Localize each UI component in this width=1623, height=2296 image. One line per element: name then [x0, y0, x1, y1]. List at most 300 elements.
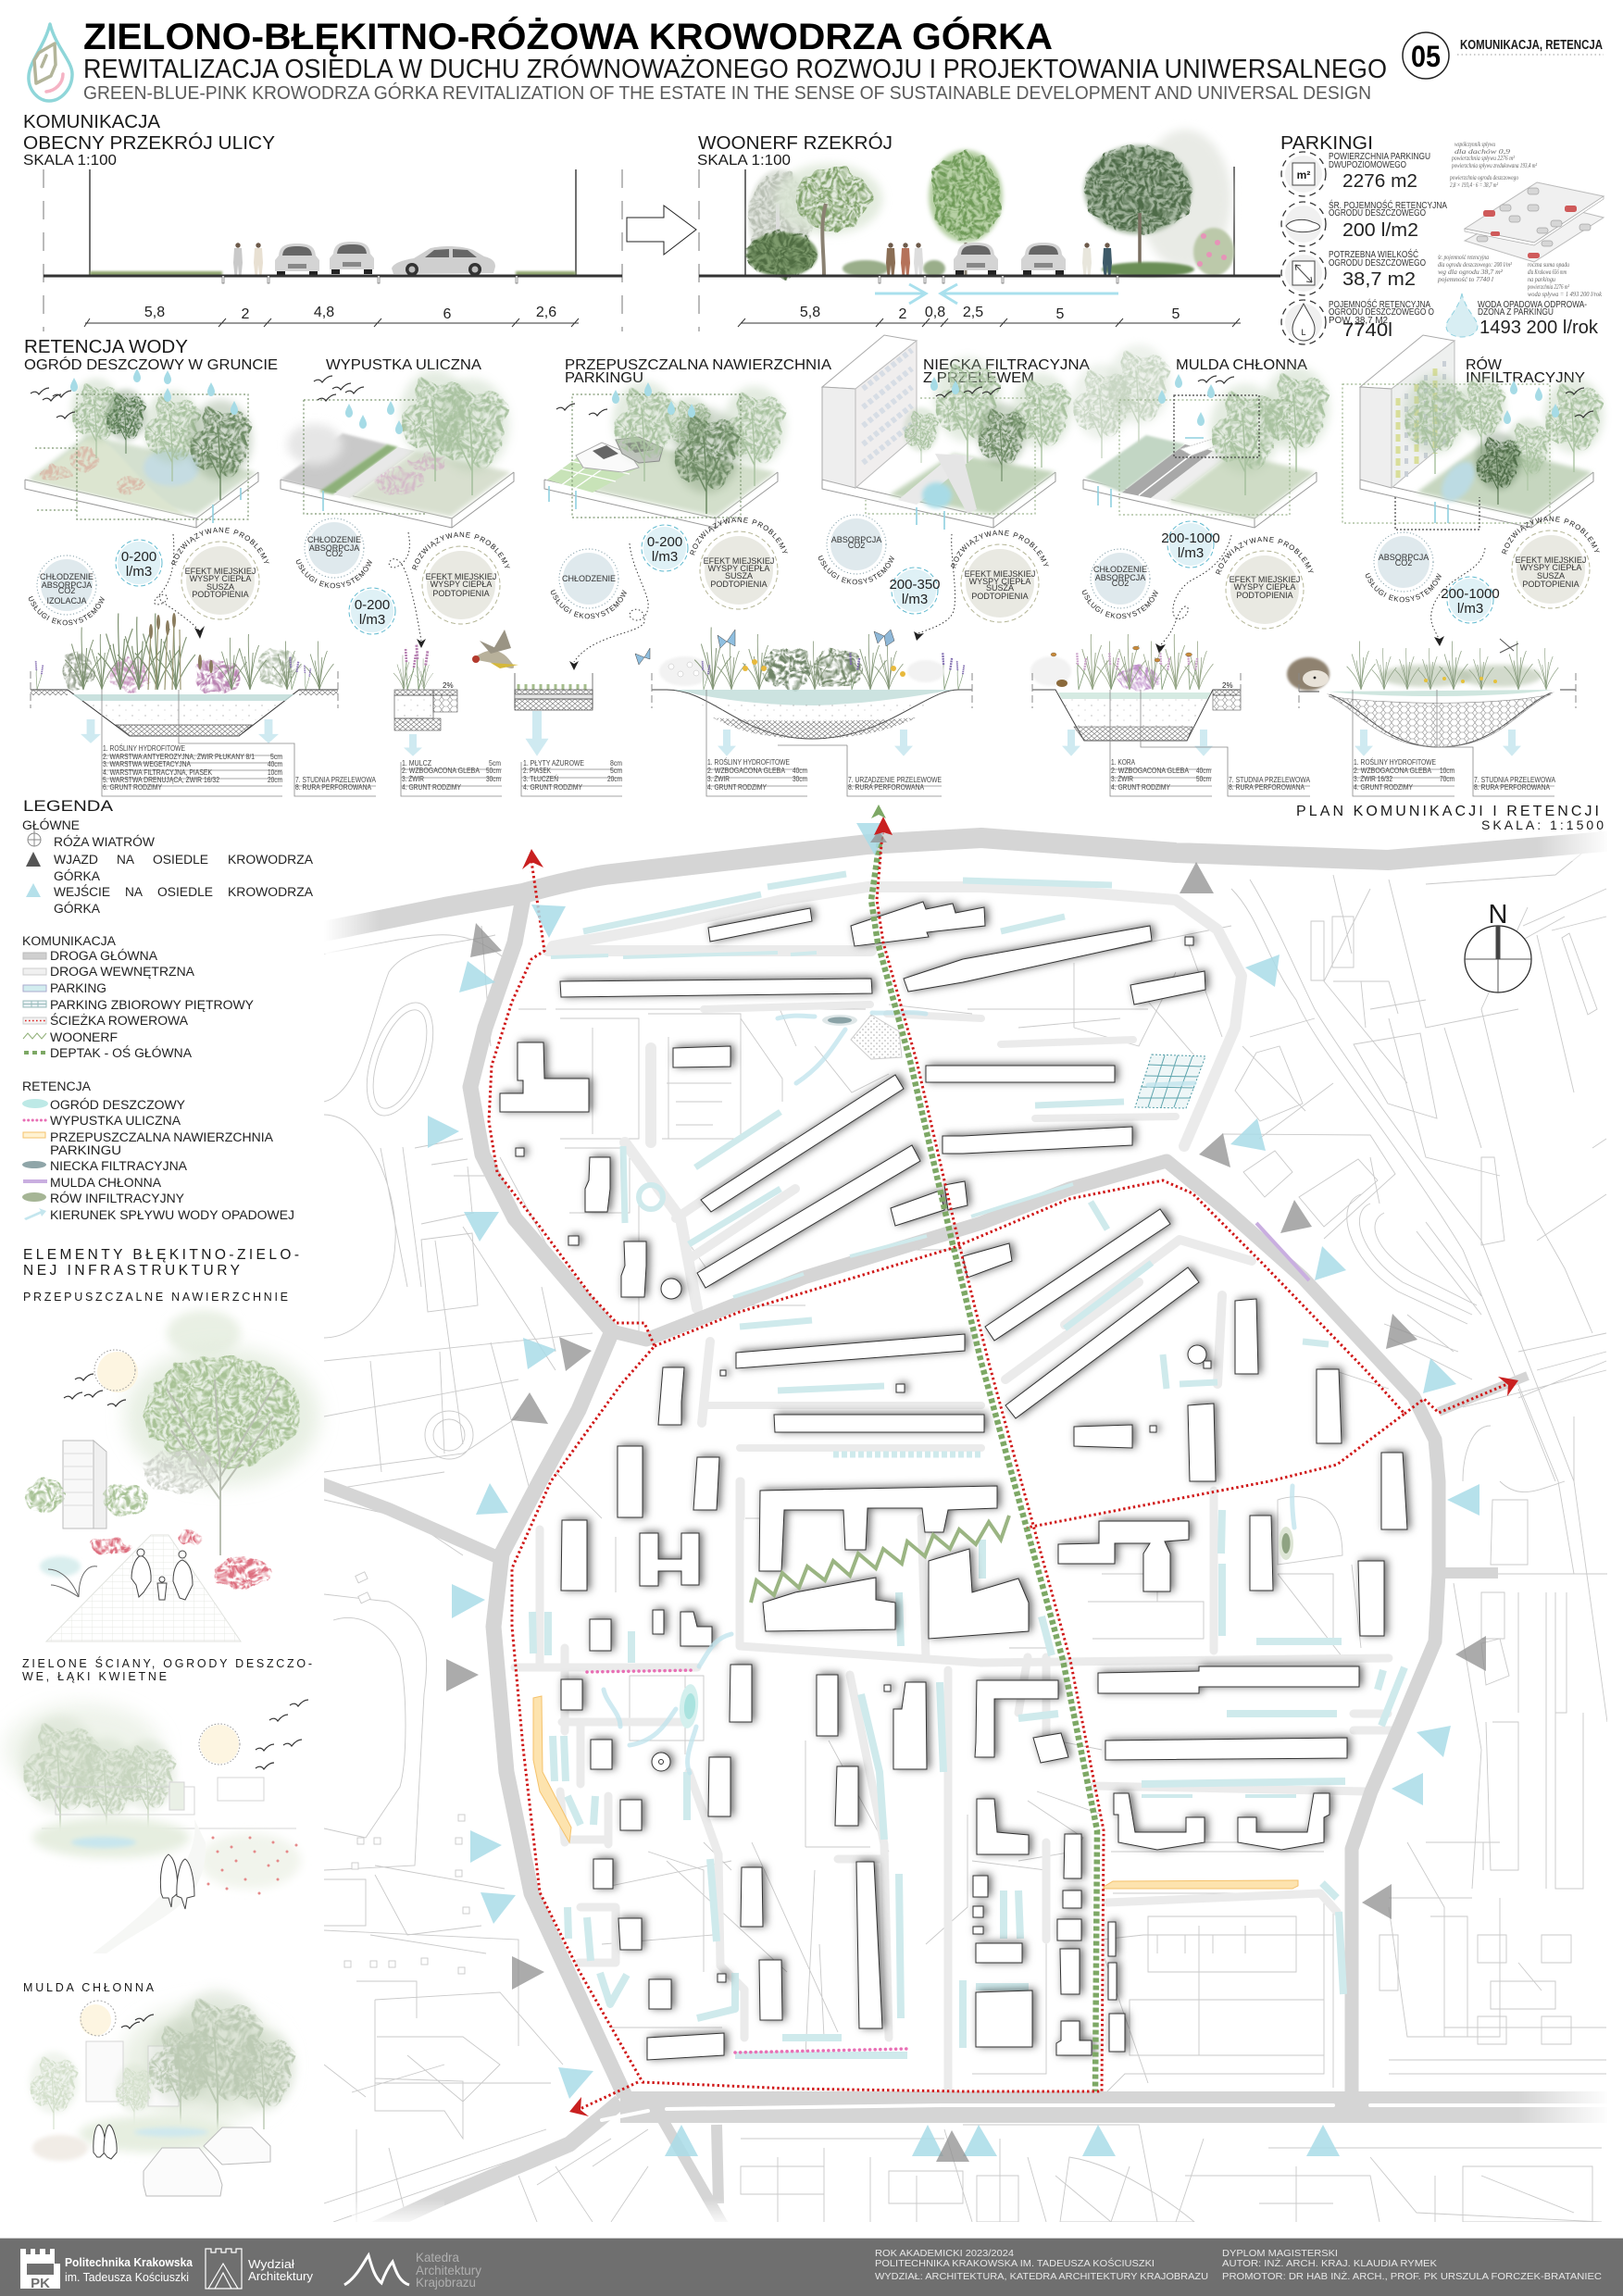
sheet number badge: 05	[1411, 40, 1441, 73]
university name: Politechnika Krakowska	[65, 2256, 194, 2269]
ecosystem diagrams: block 1	[26, 526, 271, 639]
group: retencja: RÓW INFILTRACYJNY	[50, 1192, 184, 1205]
street inlets	[587, 1670, 907, 2053]
layers table: 7. STUDNIA PRZELEWOWA	[295, 776, 377, 784]
ecosystem diagrams: block 3: SUSZA	[725, 571, 753, 580]
layers table: 3. ŻWIR 16/32	[1354, 775, 1392, 783]
metric: garden size	[1281, 248, 1426, 295]
ecosystem diagrams: block 5: USŁUGI EKOSYSTEMÓW	[1080, 589, 1161, 620]
butterflies	[635, 630, 894, 665]
heading: zielone ściany	[22, 1656, 312, 1683]
ecosystem diagrams: block 4: 200-350	[889, 577, 941, 593]
scale: SKALA 1:100	[697, 153, 791, 168]
iso block 4: filtration basin	[822, 335, 1071, 530]
absorbing swale	[1256, 1223, 1309, 1280]
iso block 1: rain garden	[25, 368, 258, 528]
layers table: 1. MULCZ	[402, 759, 431, 767]
heading: LEGENDA	[23, 797, 114, 815]
academic info	[875, 2249, 1208, 2282]
layers table: 20cm	[607, 775, 622, 783]
arrow: before to after	[627, 206, 696, 255]
group: retencja: OGRÓD DESZCZOWY	[50, 1098, 185, 1112]
layers table: 50cm	[1196, 775, 1211, 783]
heading: plan: PLAN KOMUNIKACJI I RETENCJI	[1296, 804, 1599, 819]
services circle	[26, 555, 107, 627]
department name	[416, 2250, 481, 2290]
layers table: 40cm	[268, 760, 282, 768]
department name: Krajobrazu	[416, 2275, 476, 2290]
heading: woonerf: WOONERF RZEKRÓJ	[698, 132, 893, 154]
handwritten notes: dla dachów 0,9	[1454, 147, 1510, 156]
sheet number badge	[1403, 32, 1449, 79]
subheads of six solutions: Z PRZELEWEM	[923, 370, 1034, 386]
trees	[747, 130, 1234, 277]
heading: elementy: NEJ INFRASTRUKTURY	[23, 1263, 240, 1279]
group: główne: KROWODRZA	[228, 853, 313, 867]
axis arrowhead	[871, 805, 886, 818]
route arrowheads	[522, 817, 1518, 2116]
scale: SKALA 1:100	[23, 153, 117, 168]
metric: area: POWIERZCHNIA PARKINGU	[1329, 152, 1430, 162]
plan scale: SKALA: 1:1500	[1481, 817, 1604, 832]
university name: im. Tadeusza Kościuszki	[65, 2271, 189, 2284]
layers table: 1. ROŚLINY HYDROFITOWE	[1354, 758, 1436, 767]
group: główne: NA	[117, 853, 134, 867]
layers table: 8cm	[610, 759, 622, 767]
ecosystem diagrams: block 6: EFEKT MIEJSKIEJ	[1516, 555, 1586, 565]
internal roads	[515, 887, 1401, 2091]
parking strips	[532, 874, 1405, 2055]
iso block 5: absorbing swale	[1072, 344, 1330, 528]
heading: zielone ściany: WE, ŁĄKI KWIETNE	[22, 1670, 167, 1683]
cross-section 6: infiltration ditch	[1287, 639, 1576, 796]
iso block 2: street inlet	[281, 370, 514, 528]
group: główne: KROWODRZA	[228, 885, 313, 899]
ecosystem diagrams: block 5: PODTOPIENIA	[1236, 591, 1293, 600]
illustration: permeable surfaces	[26, 1310, 319, 1641]
group: komunikacja: DROGA GŁÓWNA	[50, 949, 157, 963]
ecosystem diagrams: block 2: PODTOPIENIA	[432, 589, 490, 598]
handwritten notes: powierzchnia 2276 m²	[1527, 282, 1569, 291]
group: główne: OSIEDLE	[153, 853, 208, 867]
value circle	[116, 540, 162, 586]
ecosystem diagrams: block 5: ROZWIĄZYWANE PROBLEMY	[1214, 535, 1316, 576]
rainwater text: DZONA Z PARKINGU	[1478, 307, 1554, 318]
ecosystem diagrams: block 5: l/m3	[1178, 545, 1204, 561]
layers table: 5cm	[610, 767, 622, 775]
dimension line: 5,8	[800, 305, 820, 320]
group: główne: NA	[125, 885, 143, 899]
services circle: IZOLACJA	[46, 596, 87, 605]
metric: area: m²	[1297, 168, 1310, 181]
dimension line	[84, 305, 579, 327]
iso block 3: permeable parking	[544, 381, 786, 528]
group: główne	[22, 818, 313, 916]
layers table: 40cm	[793, 767, 807, 775]
heading: retencja wody: RETENCJA WODY	[24, 337, 188, 357]
english subtitle: GREEN-BLUE-PINK KROWODRZA GÓRKA REVITALIZATION OF THE ESTATE IN THE SENSE OF SUSTAINABLE DEVELOPMENT AND UNIVERSAL DESIGN	[83, 82, 1371, 104]
ecosystem diagrams: block 3: l/m3	[652, 549, 678, 565]
water features	[678, 1015, 1293, 1729]
bird illustration	[472, 630, 518, 668]
group: główne: GŁÓWNE	[22, 818, 80, 832]
logo: department	[344, 2255, 409, 2285]
layers table: 4. GRUNT RODZIMY	[1111, 783, 1171, 792]
metric: retention: ŚR. POJEMNOŚĆ RETENCYJNA	[1329, 199, 1447, 211]
layers table: 1. PŁYTY AŻUROWE	[523, 759, 584, 767]
ecosystem diagrams: block 3: 0-200	[647, 534, 682, 550]
dimension line	[738, 305, 1241, 327]
metric: retention	[1281, 199, 1447, 246]
logo: PK	[20, 2249, 60, 2291]
ecosystem diagrams: block 2: l/m3	[359, 612, 385, 628]
group: komunikacja: DROGA WEWNĘTRZNA	[50, 965, 194, 979]
dimension line: 2	[242, 306, 250, 322]
pavement	[46, 1535, 241, 1641]
ecosystem diagrams: block 5: ABSORPCJA	[1095, 573, 1145, 582]
handwritten notes: na parkingu	[1528, 275, 1555, 283]
ecosystem diagrams: block 2: CO2	[326, 549, 343, 558]
subheads of six solutions	[24, 357, 1585, 386]
water flow arrows	[604, 1013, 1294, 1773]
academic info: WYDZIAŁ: ARCHITEKTURA, KATEDRA ARCHITEKTURY KRAJOBRAZU	[875, 2272, 1208, 2282]
handwritten notes: powierzchnia ogrodu deszczowego	[1449, 173, 1518, 181]
group: retencja: RETENCJA	[22, 1079, 91, 1093]
group: główne: WJAZD	[54, 853, 98, 867]
handwritten notes: wg dla ogrodu 38,7 m²	[1438, 268, 1504, 276]
layers table: 3. ŻWIR	[402, 775, 424, 783]
ecosystem diagrams: block 5	[1080, 521, 1316, 654]
heading: elementy	[23, 1247, 299, 1279]
group: główne: RÓŻA WIATRÓW	[54, 835, 155, 849]
handwritten notes: pojemność to 7740 l	[1437, 275, 1493, 283]
logo: PK: PK	[31, 2276, 50, 2291]
title: ZIELONO-BŁĘKITNO-RÓŻOWA KROWODRZA GÓRKA	[83, 15, 1053, 57]
panel: parkingi	[1280, 133, 1604, 344]
layers table: 30cm	[793, 775, 807, 783]
layers table: 2. WZBOGACONA GLEBA	[1111, 767, 1190, 775]
compass: N	[1489, 900, 1507, 930]
layers table: 2. WZBOGACONA GLEBA	[707, 767, 786, 775]
layers table: 2. WARSTWA ANTYEROZYJNA, ŻWIR PŁUKANY 8/1	[103, 753, 255, 761]
thesis info: DYPLOM MAGISTERSKI	[1222, 2249, 1338, 2259]
layers table: 7. STUDNIA PRZELEWOWA	[1229, 776, 1311, 784]
ecosystem diagrams: block 2: WYSPY CIEPŁA	[431, 580, 492, 589]
metric: capacity: OGRODU DESZCZOWEGO O	[1329, 307, 1434, 318]
metric: area	[1281, 152, 1430, 196]
subtitle: REWITALIZACJA OSIEDLA W DUCHU ZRÓWNOWAŻONEGO ROZWOJU I PROJEKTOWANIA UNIWERSALNEGO	[83, 54, 1387, 84]
ecosystem diagrams: block 6: ROZWIĄZYWANE PROBLEMY	[1500, 515, 1602, 555]
ecosystem diagrams: block 3: EFEKT MIEJSKIEJ	[704, 556, 774, 566]
people	[160, 1854, 194, 1909]
buildings	[500, 902, 1407, 2060]
layers table: 3. TŁUCZEŃ	[523, 775, 558, 783]
thesis info: PROMOTOR: DR HAB INŻ. ARCH., PROF. PK URSZULA FORCZEK-BRATANIEC	[1222, 2270, 1602, 2282]
metric: capacity: L	[1301, 328, 1306, 337]
dimension line: 5,8	[144, 305, 165, 320]
group: komunikacja: ŚCIEŻKA ROWEROWA	[50, 1014, 188, 1028]
metric: retention: OGRODU DESZCZOWEGO	[1329, 208, 1426, 218]
building	[1360, 335, 1454, 488]
group: główne: WEJŚCIE	[54, 885, 110, 899]
site plan	[315, 805, 1616, 2231]
map edge fades	[324, 824, 1611, 2227]
ecosystem diagrams: block 6: l/m3	[1457, 601, 1483, 617]
cross-section 5: swale: 2%	[1222, 681, 1233, 690]
ecosystem diagrams: block 4: USŁUGI EKOSYSTEMÓW	[816, 555, 897, 586]
group: retencja: PRZEPUSZCZALNA NAWIERZCHNIA	[50, 1130, 273, 1144]
group: komunikacja: DEPTAK - OŚ GŁÓWNA	[50, 1046, 192, 1060]
metric: capacity: POW. 38,7 M2	[1329, 316, 1388, 326]
ecosystem diagrams: block 2: EFEKT MIEJSKIEJ	[426, 572, 496, 581]
layers table: 7. STUDNIA PRZELEWOWA	[1474, 776, 1556, 784]
handwritten notes: woda spływa = 1 493 200 l/rok	[1528, 290, 1603, 298]
buildings	[86, 2041, 179, 2106]
ecosystem diagrams: block 6: SUSZA	[1537, 571, 1565, 580]
layers table: 4. WARSTWA FILTRACYJNA, PIASEK	[103, 768, 213, 777]
legend panel	[22, 797, 313, 1222]
permeable surface hatch	[851, 1015, 902, 1059]
heading: komunikacja: KOMUNIKACJA	[23, 112, 161, 132]
woonerf street section	[699, 130, 1280, 331]
layers table: 70cm	[1440, 775, 1454, 783]
ecosystem diagrams: block 4: ROZWIĄZYWANE PROBLEMY	[949, 529, 1051, 569]
logo: faculty	[206, 2249, 242, 2289]
ecosystem diagrams: block 4: SUSZA	[986, 583, 1014, 593]
main promenade axis	[871, 836, 1097, 2091]
layers table: 4. GRUNT RODZIMY	[523, 783, 583, 792]
metric: capacity	[1281, 298, 1434, 344]
layers table: 5cm	[270, 753, 282, 761]
subheads of six solutions: WYPUSTKA ULICZNA	[326, 357, 482, 373]
faculty name: Architektury	[248, 2269, 313, 2283]
ecosystem diagrams: block 2: USŁUGI EKOSYSTEMÓW	[296, 559, 372, 589]
permeable parking zones	[533, 1696, 1298, 1889]
cross-section 2: street inlet	[393, 644, 502, 796]
footer bar	[0, 2238, 1623, 2296]
handwritten notes: roczna suma opadu	[1528, 260, 1569, 268]
connector arrow	[155, 534, 200, 631]
metric: garden size: OGRODU DESZCZOWEGO	[1329, 258, 1426, 268]
group: komunikacja: KOMUNIKACJA	[22, 934, 116, 948]
cross-section 2: street inlet: 2%	[443, 681, 454, 690]
layers table: 3. WARSTWA WEGETACYJNA	[103, 760, 192, 768]
problems circle: PODTOPIENIA	[192, 590, 249, 599]
layers table: 8. RURA PERFOROWANA	[848, 783, 925, 792]
cars	[576, 437, 663, 472]
subheads of six solutions: NIECKA FILTRACYJNA	[923, 357, 1091, 373]
multi-level parking grid	[1135, 1054, 1205, 1108]
group: komunikacja: WOONERF	[50, 1030, 118, 1044]
metric: capacity: 7740l	[1342, 320, 1392, 341]
rainwater text: 1493 200 l/rok	[1479, 318, 1599, 338]
cars	[275, 242, 495, 276]
layers table: 20cm	[268, 776, 282, 784]
value circle: l/m3	[126, 564, 152, 580]
ecosystem diagrams: block 5: EFEKT MIEJSKIEJ	[1230, 575, 1300, 584]
layers table: 3. ŻWIR	[1111, 775, 1133, 783]
layers table: 1. KORA	[1111, 758, 1136, 767]
handwritten notes: 2,8 × 193,4 · 6 = 38,7 m²	[1450, 181, 1499, 189]
cross-section 4: filtration basin	[652, 628, 972, 796]
isometric parking	[1465, 182, 1604, 262]
ecosystem diagrams: block 6: WYSPY CIEPŁA	[1520, 563, 1581, 572]
people and cars	[886, 243, 1112, 276]
layers table: 10cm	[1440, 767, 1454, 775]
subheads of six solutions: RÓW	[1466, 357, 1502, 373]
group: retencja: NIECKA FILTRACYJNA	[50, 1159, 187, 1173]
subheads of six solutions: PARKINGU	[565, 370, 643, 386]
ecosystem diagrams: block 3: CHŁODZENIE	[562, 574, 616, 583]
metric: area: DWUPOZIOMOWEGO	[1329, 160, 1406, 170]
dimension line: 2	[899, 306, 907, 322]
layers table: 8. RURA PERFOROWANA	[1474, 783, 1551, 792]
people	[94, 2125, 117, 2159]
layers table	[1353, 690, 1556, 796]
layers table: 7. URZĄDZENIE PRZELEWOWE	[848, 776, 942, 784]
layers table: 50cm	[486, 767, 501, 775]
handwritten notes: dla Krakowa 656 mm	[1528, 268, 1567, 276]
ecosystem diagrams: block 6: PODTOPIENIA	[1522, 580, 1579, 589]
illustration: absorbing swale	[29, 1990, 295, 2196]
layers table: 5cm	[489, 759, 501, 767]
dimension line: 2,5	[963, 305, 983, 320]
ecosystem diagrams: block 6: CO2	[1395, 558, 1412, 568]
water flow arrows	[875, 284, 1118, 304]
group: komunikacja: PARKING	[50, 981, 106, 995]
ecosystem diagrams: block 4: PODTOPIENIA	[971, 592, 1029, 601]
heading: mulda chłonna: MULDA CHŁONNA	[23, 1981, 155, 1994]
layers table: 4. GRUNT RODZIMY	[1354, 783, 1414, 792]
subheads of six solutions: INFILTRACYJNY	[1466, 370, 1585, 386]
ecosystem diagrams: block 4: WYSPY CIEPŁA	[969, 577, 1030, 586]
layers table	[401, 759, 502, 796]
academic info: ROK AKADEMICKI 2023/2024	[875, 2249, 1014, 2259]
thesis info: AUTOR: INŻ. ARCH. KRAJ. KLAUDIA RYMEK	[1222, 2257, 1437, 2269]
handwritten notes: powierzchnia spływu zredukowana 193,4 m²	[1451, 161, 1538, 169]
layers table: 1. ROŚLINY HYDROFITOWE	[103, 744, 185, 753]
group: główne: GÓRKA	[54, 869, 100, 883]
ecosystem diagrams: block 6	[1363, 515, 1602, 646]
layers table: 1. ROŚLINY HYDROFITOWE	[707, 758, 790, 767]
layers table	[521, 759, 622, 796]
faculty name	[248, 2257, 313, 2283]
ecosystem diagrams: block 2: 0-200	[355, 597, 390, 613]
department name: Architektury	[416, 2263, 481, 2277]
heading: obecny przekrój: OBECNY PRZEKRÓJ ULICY	[23, 132, 275, 154]
subheads of six solutions: MULDA CHŁONNA	[1176, 357, 1308, 373]
value circle: 0-200	[121, 549, 156, 565]
cycle routes	[489, 822, 1507, 2111]
department name: Katedra	[416, 2250, 459, 2265]
cadastre linework	[324, 833, 1607, 2222]
metric: area: 2276 m2	[1342, 171, 1417, 192]
layers table: 10cm	[268, 768, 282, 777]
layers table: 3. ŻWIR	[707, 775, 730, 783]
group: retencja: WYPUSTKA ULICZNA	[50, 1114, 181, 1128]
dimension line: 4,8	[314, 305, 334, 320]
services circle: CO2	[58, 586, 75, 595]
cars	[144, 2128, 270, 2196]
ecosystem diagrams: block 3: PODTOPIENIA	[710, 580, 768, 589]
layers table: 30cm	[486, 775, 501, 783]
current street section	[44, 169, 622, 331]
ecosystem diagrams: block 2	[293, 518, 512, 648]
layers table: 5. WARSTWA DRENUJĄCA, ŻWIR 16/32	[103, 776, 219, 784]
logo: drop	[29, 24, 72, 101]
ecosystem diagrams: block 2: ABSORPCJA	[309, 543, 359, 553]
ecosystem diagrams: block 3: WYSPY CIEPŁA	[708, 564, 769, 573]
handwritten notes: powierzchnia spływu 2276 m²	[1451, 154, 1516, 162]
academic info: POLITECHNIKA KRAKOWSKA IM. TADEUSZA KOŚCIUSZKI	[875, 2257, 1155, 2269]
plants	[36, 613, 333, 693]
plants	[659, 628, 964, 690]
building	[822, 335, 917, 488]
ecosystem diagrams: block 5: CO2	[1112, 579, 1129, 588]
layers table: 4. GRUNT RODZIMY	[707, 783, 768, 792]
rainwater text: WODA OPADOWA ODPROWA-	[1478, 300, 1587, 310]
layers table: 2. WZBOGACONA GLEBA	[402, 767, 481, 775]
cross-section 1: rain garden	[31, 613, 377, 796]
layers table: 2. WZBOGACONA GLEBA	[1354, 767, 1432, 775]
ecosystem diagrams: block 6: USŁUGI EKOSYSTEMÓW	[1363, 572, 1444, 604]
hedgehog	[1287, 657, 1330, 691]
group: retencja: PARKINGU	[50, 1143, 121, 1157]
rainwater text	[1478, 300, 1599, 338]
ecosystem diagrams: block 5: 200-1000	[1161, 530, 1220, 546]
layers table: 4. GRUNT RODZIMY	[402, 783, 462, 792]
ecosystem diagrams: block 4: l/m3	[902, 592, 928, 607]
dimension line: 5	[1056, 306, 1065, 322]
ecosystem diagrams: block 2: ROZWIĄZYWANE PROBLEMY	[412, 531, 510, 570]
ecosystem diagrams: block 3: USŁUGI EKOSYSTEMÓW	[550, 589, 627, 618]
icon: water drop	[1446, 293, 1478, 337]
dimension line: 5	[1172, 306, 1180, 322]
iso block 6: infiltration ditch	[1342, 335, 1604, 530]
ecosystem diagrams: block 4: EFEKT MIEJSKIEJ	[965, 569, 1035, 579]
metric: garden size: POTRZEBNA WIELKOŚĆ	[1329, 248, 1418, 260]
group: retencja: KIERUNEK SPŁYWU WODY OPADOWEJ	[50, 1208, 294, 1222]
handwritten notes	[1437, 140, 1603, 298]
dimension line: 2,6	[536, 305, 556, 320]
building	[63, 1441, 106, 1529]
ecosystem diagrams: block 4: ABSORPCJA	[831, 535, 881, 544]
dimension line: 6	[443, 306, 452, 322]
subheads of six solutions: PRZEPUSZCZALNA NAWIERZCHNIA	[565, 357, 832, 373]
group: komunikacja: PARKING ZBIOROWY PIĘTROWY	[50, 998, 254, 1012]
layers table: 6. GRUNT RODZIMY	[103, 783, 163, 792]
services circle: ABSORPCJA	[42, 580, 92, 590]
cross-section 3: permeable paving	[515, 673, 622, 796]
dimension line: 0,8	[925, 305, 945, 320]
group: komunikacja	[22, 934, 254, 1060]
ecosystem diagrams: block 6: 200-1000	[1441, 586, 1500, 602]
layers table	[706, 690, 942, 796]
group: retencja: MULDA CHŁONNA	[50, 1176, 161, 1190]
people	[233, 243, 263, 276]
entrance triangles: vehicle	[446, 830, 1486, 2162]
ecosystem diagrams: block 4: CO2	[848, 541, 865, 550]
services circle: USŁUGI EKOSYSTEMÓW	[28, 596, 105, 626]
handwritten notes: dla ogrodu deszczowego: 200 l/m²	[1438, 260, 1513, 268]
university name	[65, 2256, 194, 2284]
problems circle: SUSZA	[206, 582, 234, 592]
handwritten notes: współczynnik spływu	[1454, 140, 1495, 148]
group: retencja	[22, 1079, 294, 1222]
faculty name: Wydział	[248, 2257, 294, 2271]
layers table: 2. PIASEK	[523, 767, 552, 775]
ecosystem diagrams: block 5: WYSPY CIEPŁA	[1234, 582, 1295, 592]
